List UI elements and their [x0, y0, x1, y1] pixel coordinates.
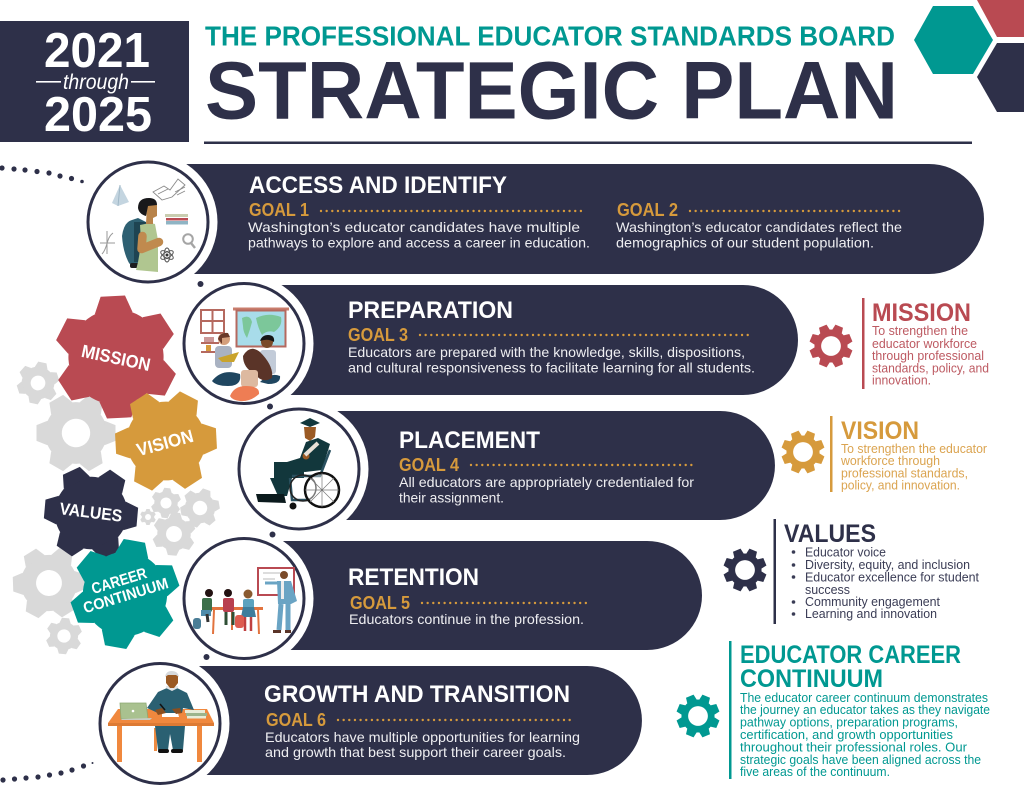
mission text: through professional [872, 348, 984, 363]
gear: career continuum [61, 531, 189, 657]
values list: Educator excellence for student [805, 570, 979, 584]
icon: students with map [201, 308, 289, 401]
values list: Community engagement [805, 594, 940, 609]
continuum text: throughout their professional roles. Our [740, 740, 968, 754]
continuum heading [740, 641, 961, 693]
goal 5: GOAL 5 [350, 593, 410, 613]
goal 1: GOAL 1 [249, 200, 309, 220]
continuum text: strategic goals have been aligned across the [740, 752, 981, 767]
icon: continuum gear [670, 688, 726, 744]
panel: values [717, 519, 979, 624]
mission heading: MISSION [872, 299, 971, 327]
icon: hexagons [914, 0, 1024, 112]
year badge [0, 21, 189, 142]
goal 2: demographics of our student population. [616, 234, 874, 250]
continuum text [740, 690, 990, 779]
heading: PLACEMENT [399, 427, 540, 454]
goal 3: and cultural responsiveness to facilitate learning for all students. [348, 360, 755, 376]
vision text: policy, and innovation. [841, 478, 960, 492]
goal 5 [349, 593, 587, 627]
continuum heading: EDUCATOR CAREER [740, 641, 961, 669]
panel: vision [775, 416, 988, 492]
goal 6: GOAL 6 [266, 710, 326, 730]
goal 6 [265, 710, 580, 760]
gear: values [25, 448, 157, 578]
goal 2 [616, 200, 904, 250]
icon: values gear [717, 542, 773, 598]
gear: career continuum: CAREER [90, 565, 149, 598]
icon: teacher with students [193, 568, 297, 634]
continuum text: five areas of the continuum. [740, 764, 890, 779]
panel: access and identify [78, 152, 984, 292]
goal 5: Educators continue in the profession. [349, 611, 584, 627]
heading: GROWTH AND TRANSITION [264, 681, 570, 708]
title: STRATEGIC PLAN [205, 46, 898, 136]
panel: retention [174, 529, 702, 668]
dotted path bottom [0, 762, 93, 783]
heading: PREPARATION [348, 297, 513, 324]
values list: Educator voice [805, 544, 886, 560]
values list [792, 544, 979, 621]
goal 2: Washington’s educator candidates reflect the [616, 219, 902, 235]
values list: success [805, 582, 850, 597]
goal 2: GOAL 2 [617, 200, 678, 220]
gear: values: VALUES [59, 499, 123, 526]
mission text: educator workforce [872, 336, 977, 351]
vision text: professional standards, [841, 466, 968, 480]
gear: vision [97, 373, 235, 509]
icon: mission gear [803, 318, 859, 374]
vision heading: VISION [841, 417, 919, 445]
gray background gears [0, 358, 225, 656]
goal 1: Washington’s educator candidates have multiple [248, 219, 580, 235]
vision text: To strengthen the educator [841, 441, 988, 456]
vision text [840, 441, 988, 492]
panel: placement [230, 400, 775, 538]
goal 3: GOAL 3 [348, 325, 408, 345]
gear: mission [51, 293, 181, 421]
panel: growth and transition [90, 654, 642, 793]
goal 4: their assignment. [399, 490, 504, 506]
gear: career continuum: CONTINUUM [81, 575, 170, 617]
goal 6: Educators have multiple opportunities for learning [265, 729, 580, 745]
mission text: innovation. [872, 372, 931, 388]
heading: RETENTION [348, 564, 479, 591]
continuum text: The educator career continuum demonstrates [740, 690, 988, 705]
goal 1 [248, 200, 590, 250]
continuum text: pathway options, preparation programs, [740, 714, 958, 730]
year badge: through [63, 71, 129, 94]
vision text: workforce through [840, 453, 940, 468]
values list: Diversity, equity, and inclusion [805, 557, 970, 572]
continuum text: certification, and growth opportunities [740, 727, 953, 742]
goal 6: and growth that best support their career goals. [265, 744, 566, 760]
panel: educator career continuum [670, 641, 990, 779]
icon: vision gear [775, 424, 831, 480]
values heading: VALUES [784, 520, 876, 548]
mission text: To strengthen the [872, 323, 968, 338]
gear: mission: MISSION [80, 341, 152, 375]
heading: ACCESS AND IDENTIFY [249, 172, 507, 199]
continuum heading: CONTINUUM [740, 665, 883, 693]
mission text: standards, policy, and [872, 360, 989, 376]
panel: mission [803, 298, 989, 389]
icon: graduate in wheelchair [256, 418, 339, 510]
mission text [872, 323, 989, 388]
continuum text: the journey an educator takes as they navigate [740, 702, 990, 717]
title: THE PROFESSIONAL EDUCATOR STANDARDS BOARD [205, 20, 895, 52]
icon: educator at desk [108, 671, 214, 762]
values list: Learning and innovation [805, 606, 937, 621]
goal 4: GOAL 4 [399, 455, 459, 475]
goal 4 [399, 455, 694, 506]
goal 4: All educators are appropriately credentialed for [399, 474, 694, 490]
gear: vision: VISION [134, 426, 196, 460]
panel: preparation [174, 274, 798, 413]
goal 1: pathways to explore and access a career in education. [248, 234, 590, 250]
title [204, 20, 972, 144]
dotted path top [0, 165, 84, 183]
year badge: 2021 [44, 24, 150, 78]
year badge: 2025 [44, 88, 152, 142]
goal 3 [348, 325, 755, 376]
icon: student with backpack [100, 179, 195, 272]
goal 3: Educators are prepared with the knowledge, skills, dispositions, [348, 344, 745, 360]
connector dots [198, 281, 276, 660]
